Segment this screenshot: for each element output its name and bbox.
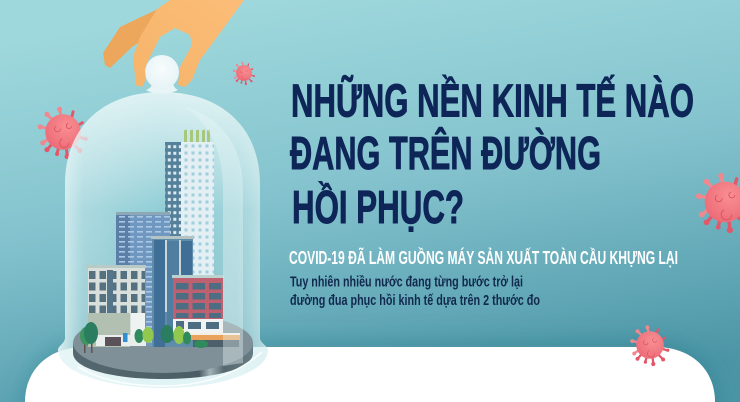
platform [73, 313, 253, 379]
building: centre block [151, 236, 194, 347]
hand [103, 0, 244, 87]
rim ring [78, 352, 262, 386]
building: grey left block [86, 265, 146, 347]
body text: đường đua phục hồi kinh tế dựa trên 2 thước đo [290, 292, 540, 309]
trees [80, 322, 208, 353]
building: dark tower [165, 142, 181, 242]
building: red block [172, 275, 224, 334]
building: tall white tower [181, 130, 214, 278]
city on platform [73, 130, 253, 379]
body text [290, 274, 540, 309]
shop awning [190, 333, 240, 347]
glass bell back [58, 92, 268, 388]
knob [146, 80, 178, 94]
virus: right [696, 173, 740, 233]
virus: small top [233, 62, 255, 85]
panel shadow [25, 345, 715, 402]
virus: left [38, 107, 88, 159]
title: HỒI PHỤC? [292, 181, 464, 233]
body text: Tuy nhiên nhiều nước đang từng bước trở lại [290, 274, 523, 290]
white bottom panel [25, 347, 715, 402]
title [290, 74, 694, 233]
building: blue glass block [116, 212, 170, 346]
inner highlight band [185, 107, 243, 366]
virus: bottom right [630, 325, 669, 366]
glass bell front [78, 55, 262, 386]
